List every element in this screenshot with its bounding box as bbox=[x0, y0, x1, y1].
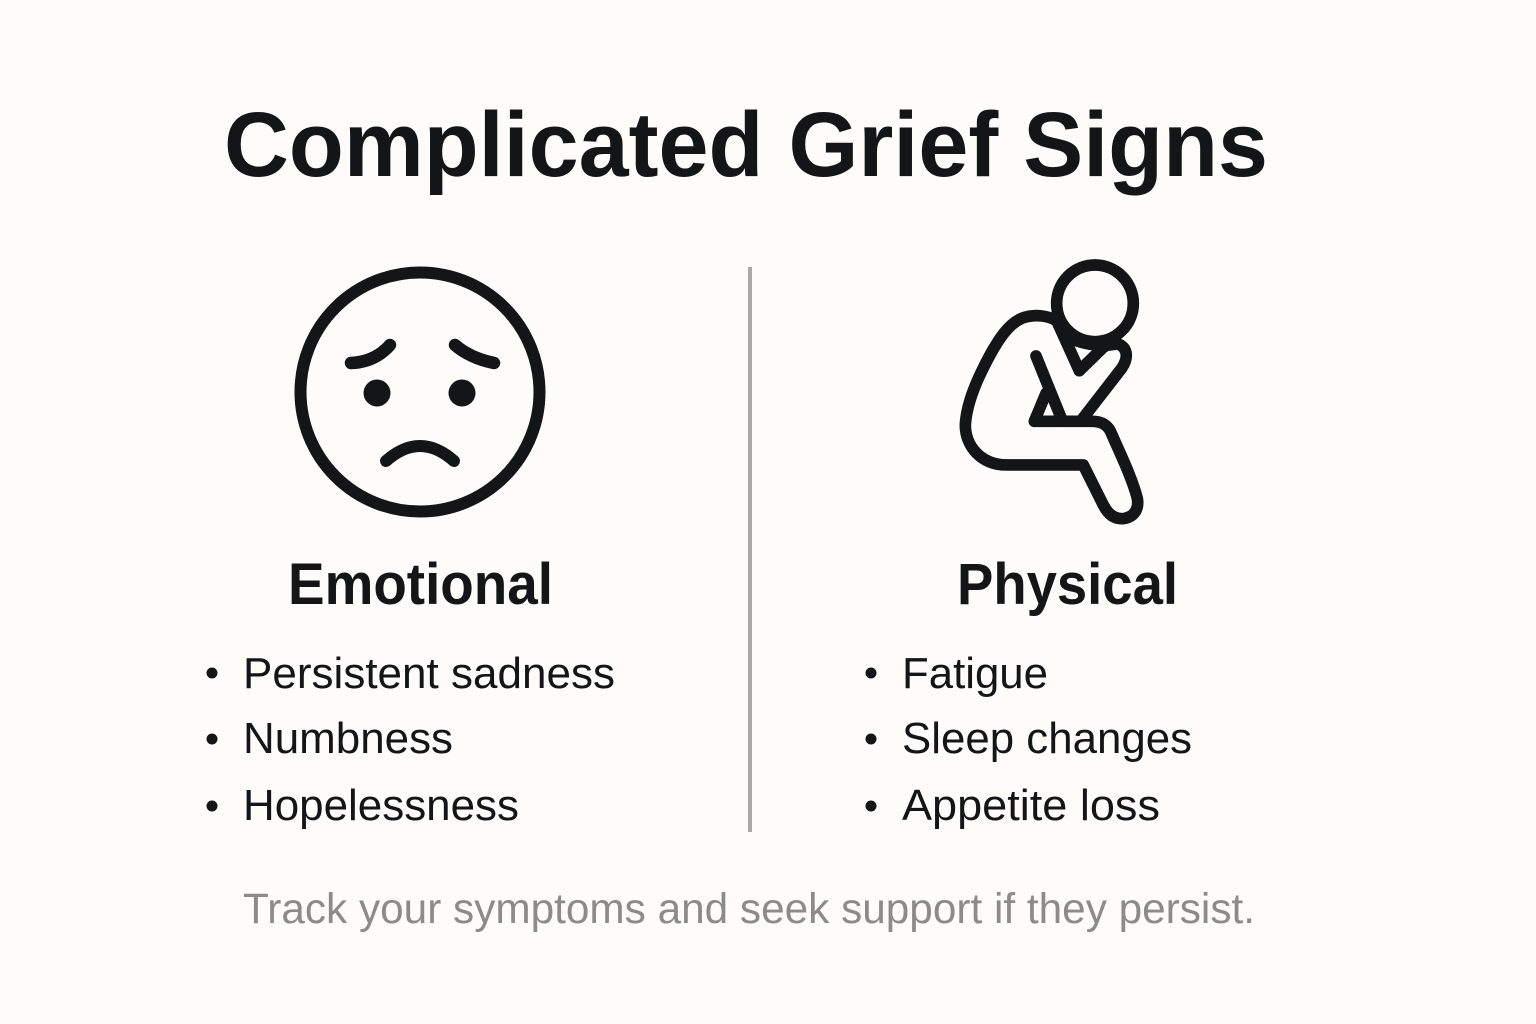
heading: emotional: Emotional bbox=[288, 552, 553, 617]
list: emotional signs: Persistent sadness bbox=[243, 649, 615, 698]
panel: physical bbox=[866, 265, 1192, 830]
list: physical signs bbox=[866, 649, 1192, 830]
panel: emotional bbox=[206, 272, 615, 830]
list: physical signs: Sleep changes bbox=[902, 714, 1192, 763]
heading: physical: Physical bbox=[957, 552, 1178, 617]
list: physical signs: Appetite loss bbox=[902, 781, 1160, 830]
footer note: Track your symptoms and seek support if they persist. bbox=[243, 885, 1255, 933]
list: emotional signs: Hopelessness bbox=[243, 781, 519, 830]
icon: sad face bbox=[300, 272, 540, 512]
list: physical signs: Fatigue bbox=[902, 649, 1048, 698]
list: emotional signs bbox=[206, 649, 615, 830]
title: Complicated Grief Signs bbox=[224, 94, 1268, 196]
list: emotional signs: Numbness bbox=[243, 714, 453, 763]
icon: hunched figure bbox=[965, 265, 1138, 519]
